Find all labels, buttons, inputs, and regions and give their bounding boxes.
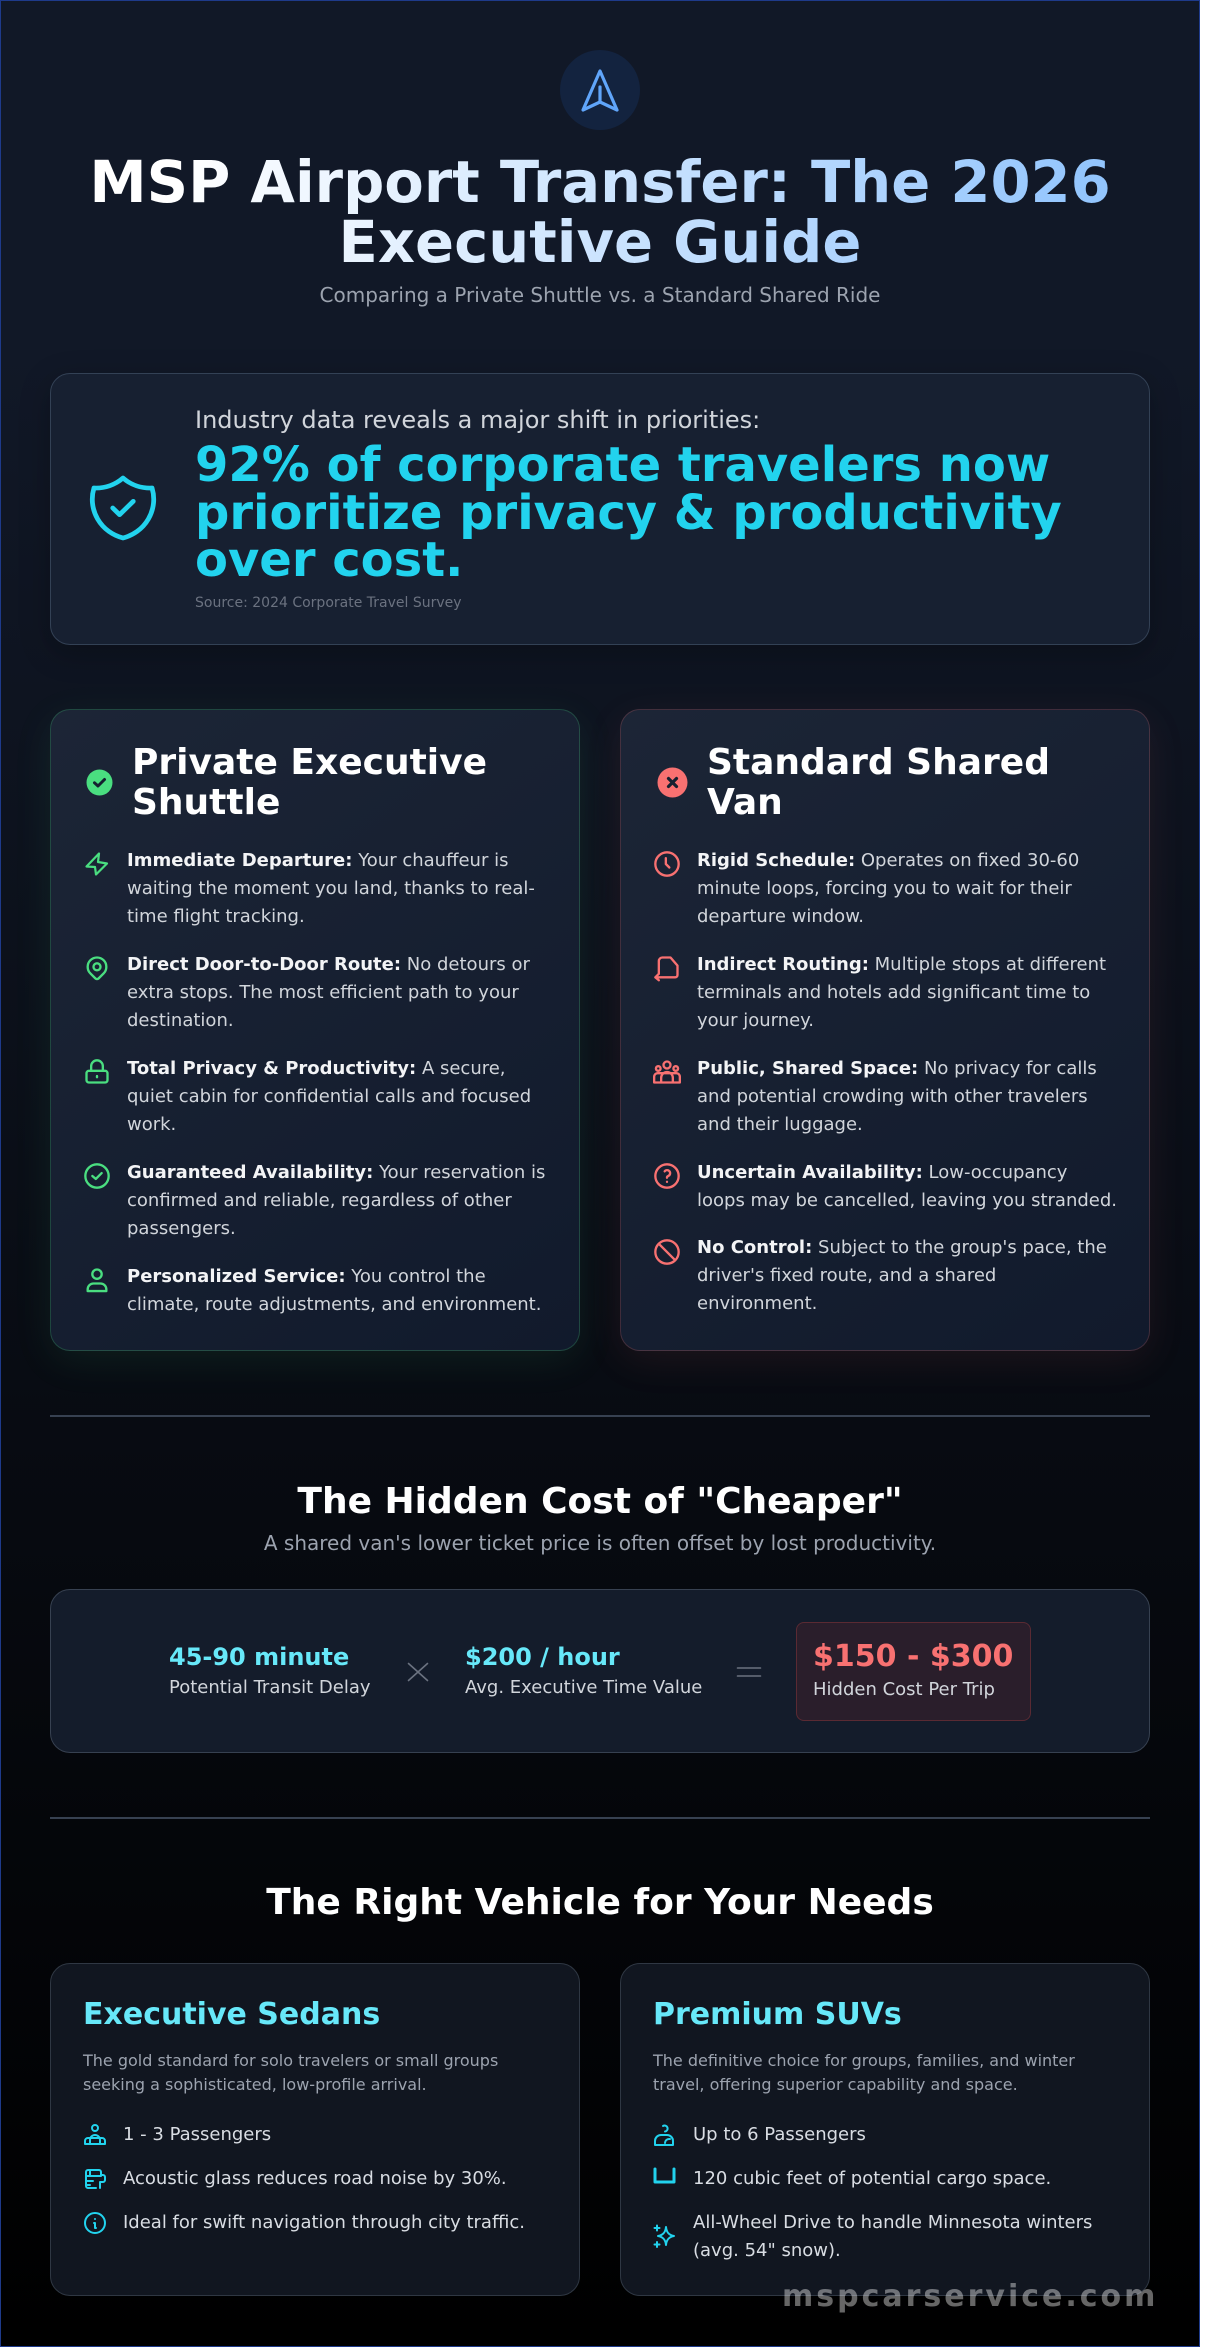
item: indirect routing: your journey. [697, 1010, 814, 1031]
item: no control: environment. [697, 1293, 817, 1314]
item: indirect routing [654, 954, 1106, 1031]
subheading: hidden cost: A shared van's lower ticket price is often offset by lost productivity. [264, 1531, 936, 1555]
item: guaranteed availability: confirmed and reliable, regardless of other [127, 1190, 512, 1211]
description: The definitive choice for groups, families, and winter [653, 2051, 1075, 2070]
item: rigid schedule: departure window. [697, 906, 864, 927]
panel: executive sedans [50, 1963, 580, 2296]
result: hidden cost per trip [796, 1622, 1031, 1721]
panel: standard shared van [620, 709, 1150, 1351]
heading: hidden cost: The Hidden Cost of "Cheaper" [297, 1481, 903, 1522]
formula term: transit delay: Potential Transit Delay [169, 1677, 371, 1698]
item: public shared space [653, 1058, 1097, 1135]
item: passengers: Up to 6 Passengers [693, 2124, 866, 2145]
item: passengers: 1 - 3 Passengers [123, 2124, 271, 2145]
item: rigid schedule: minute loops, forcing you to wait for their [697, 878, 1072, 899]
intro text: Industry data reveals a major shift in priorities: [195, 406, 760, 434]
item: immediate departure: waiting the moment you land, thanks to real- [127, 878, 535, 899]
heading: Shuttle [132, 782, 280, 823]
item: total privacy: work. [127, 1114, 176, 1135]
item: direct route: extra stops. The most efficient path to your [127, 982, 519, 1003]
item: guaranteed availability: passengers. [127, 1218, 236, 1239]
description [82, 2051, 498, 2094]
panel: premium SUVs [620, 1963, 1150, 2296]
item: immediate departure [85, 850, 535, 927]
result: hidden cost per trip: $150 - $300 [813, 1639, 1013, 1674]
formula term: executive time value: $200 / hour [465, 1643, 620, 1671]
heading: Standard Shared [707, 742, 1050, 783]
heading: Van [707, 782, 783, 823]
item: personalized service: Personalized Service: You control the [127, 1266, 486, 1287]
formula term: executive time value: Avg. Executive Time Value [465, 1677, 702, 1698]
item: no control [654, 1237, 1107, 1314]
item: guaranteed availability [84, 1162, 545, 1239]
heading: Premium SUVs [653, 1997, 902, 2032]
key statistic text: 92% of corporate travelers now [195, 437, 1050, 493]
item: indirect routing: Indirect Routing: Multiple stops at different [697, 954, 1106, 975]
icon: navigation logo [560, 50, 640, 130]
key statistic text [195, 437, 1062, 588]
heading: Private Executive [132, 742, 487, 783]
heading [707, 742, 1050, 823]
item: personalized service [86, 1266, 541, 1315]
panel: key statistic [50, 373, 1150, 645]
item: guaranteed availability: Guaranteed Availability: Your reservation is [127, 1162, 545, 1183]
title: MSP Airport Transfer: The 2026 [89, 149, 1111, 216]
key statistic text: over cost. [195, 532, 463, 588]
item: all-wheel drive: (avg. 54" snow). [693, 2240, 841, 2261]
item: immediate departure: Immediate Departure: Your chauffeur is [127, 850, 508, 871]
item: acoustic glass: Acoustic glass reduces road noise by 30%. [123, 2168, 507, 2189]
item: all-wheel drive [654, 2212, 1092, 2261]
formula term: transit delay [169, 1643, 371, 1698]
operator: multiply [408, 1662, 428, 1682]
watermark: mspcarservice.com [782, 2279, 1158, 2314]
operator: equals [736, 1667, 762, 1677]
source note: Source: 2024 Corporate Travel Survey [195, 595, 462, 611]
item: direct route: destination. [127, 1010, 234, 1031]
item: no control: driver's fixed route, and a shared [697, 1265, 996, 1286]
result: hidden cost per trip: Hidden Cost Per Trip [813, 1679, 995, 1700]
key statistic text: prioritize privacy & productivity [195, 484, 1062, 540]
title: Executive Guide [339, 209, 861, 276]
title [1, 153, 1199, 273]
panel: private executive shuttle [50, 709, 580, 1351]
item: total privacy: Total Privacy & Productivity: A secure, [127, 1058, 506, 1079]
heading: right vehicle: The Right Vehicle for Your Needs [266, 1882, 934, 1923]
item: all-wheel drive: All-Wheel Drive to handle Minnesota winters [693, 2212, 1092, 2233]
heading [132, 742, 487, 823]
item: uncertain availability: Uncertain Availability: Low-occupancy [697, 1162, 1067, 1183]
description: seeking a sophisticated, low-profile arrival. [83, 2075, 427, 2094]
item: public shared space: and potential crowding with other travelers [697, 1086, 1088, 1107]
item: no control: No Control: Subject to the group's pace, the [697, 1237, 1107, 1258]
icon: green check badge [86, 770, 112, 796]
description [652, 2051, 1075, 2094]
item: public shared space: Public, Shared Space: No privacy for calls [697, 1058, 1097, 1079]
icon: shield check [90, 476, 156, 540]
description: The gold standard for solo travelers or small groups [83, 2051, 498, 2070]
item: cargo space: 120 cubic feet of potential cargo space. [693, 2168, 1051, 2189]
formula term: executive time value [465, 1643, 702, 1698]
item: total privacy: quiet cabin for confidential calls and focused [127, 1086, 531, 1107]
item: uncertain availability [654, 1162, 1117, 1211]
item: direct route: Direct Door-to-Door Route: No detours or [127, 954, 530, 975]
item: immediate departure: time flight tracking. [127, 906, 305, 927]
item: direct route [86, 954, 530, 1031]
formula term: transit delay: 45-90 minute [169, 1643, 349, 1671]
heading: Executive Sedans [83, 1997, 380, 2032]
icon: red cross badge [658, 768, 688, 798]
item: rigid schedule: Rigid Schedule: Operates on fixed 30-60 [697, 850, 1079, 871]
item: personalized service: climate, route adjustments, and environment. [127, 1294, 541, 1315]
item: rigid schedule [654, 850, 1079, 927]
item: indirect routing: terminals and hotels add significant time to [697, 982, 1090, 1003]
item: public shared space: and their luggage. [697, 1114, 863, 1135]
panel: hidden cost formula [50, 1589, 1150, 1753]
description: travel, offering superior capability and space. [653, 2075, 1018, 2094]
item: navigation: Ideal for swift navigation through city traffic. [123, 2212, 525, 2233]
subtitle: Comparing a Private Shuttle vs. a Standard Shared Ride [320, 283, 880, 307]
item: total privacy [85, 1058, 531, 1135]
item: uncertain availability: loops may be cancelled, leaving you stranded. [697, 1190, 1117, 1211]
